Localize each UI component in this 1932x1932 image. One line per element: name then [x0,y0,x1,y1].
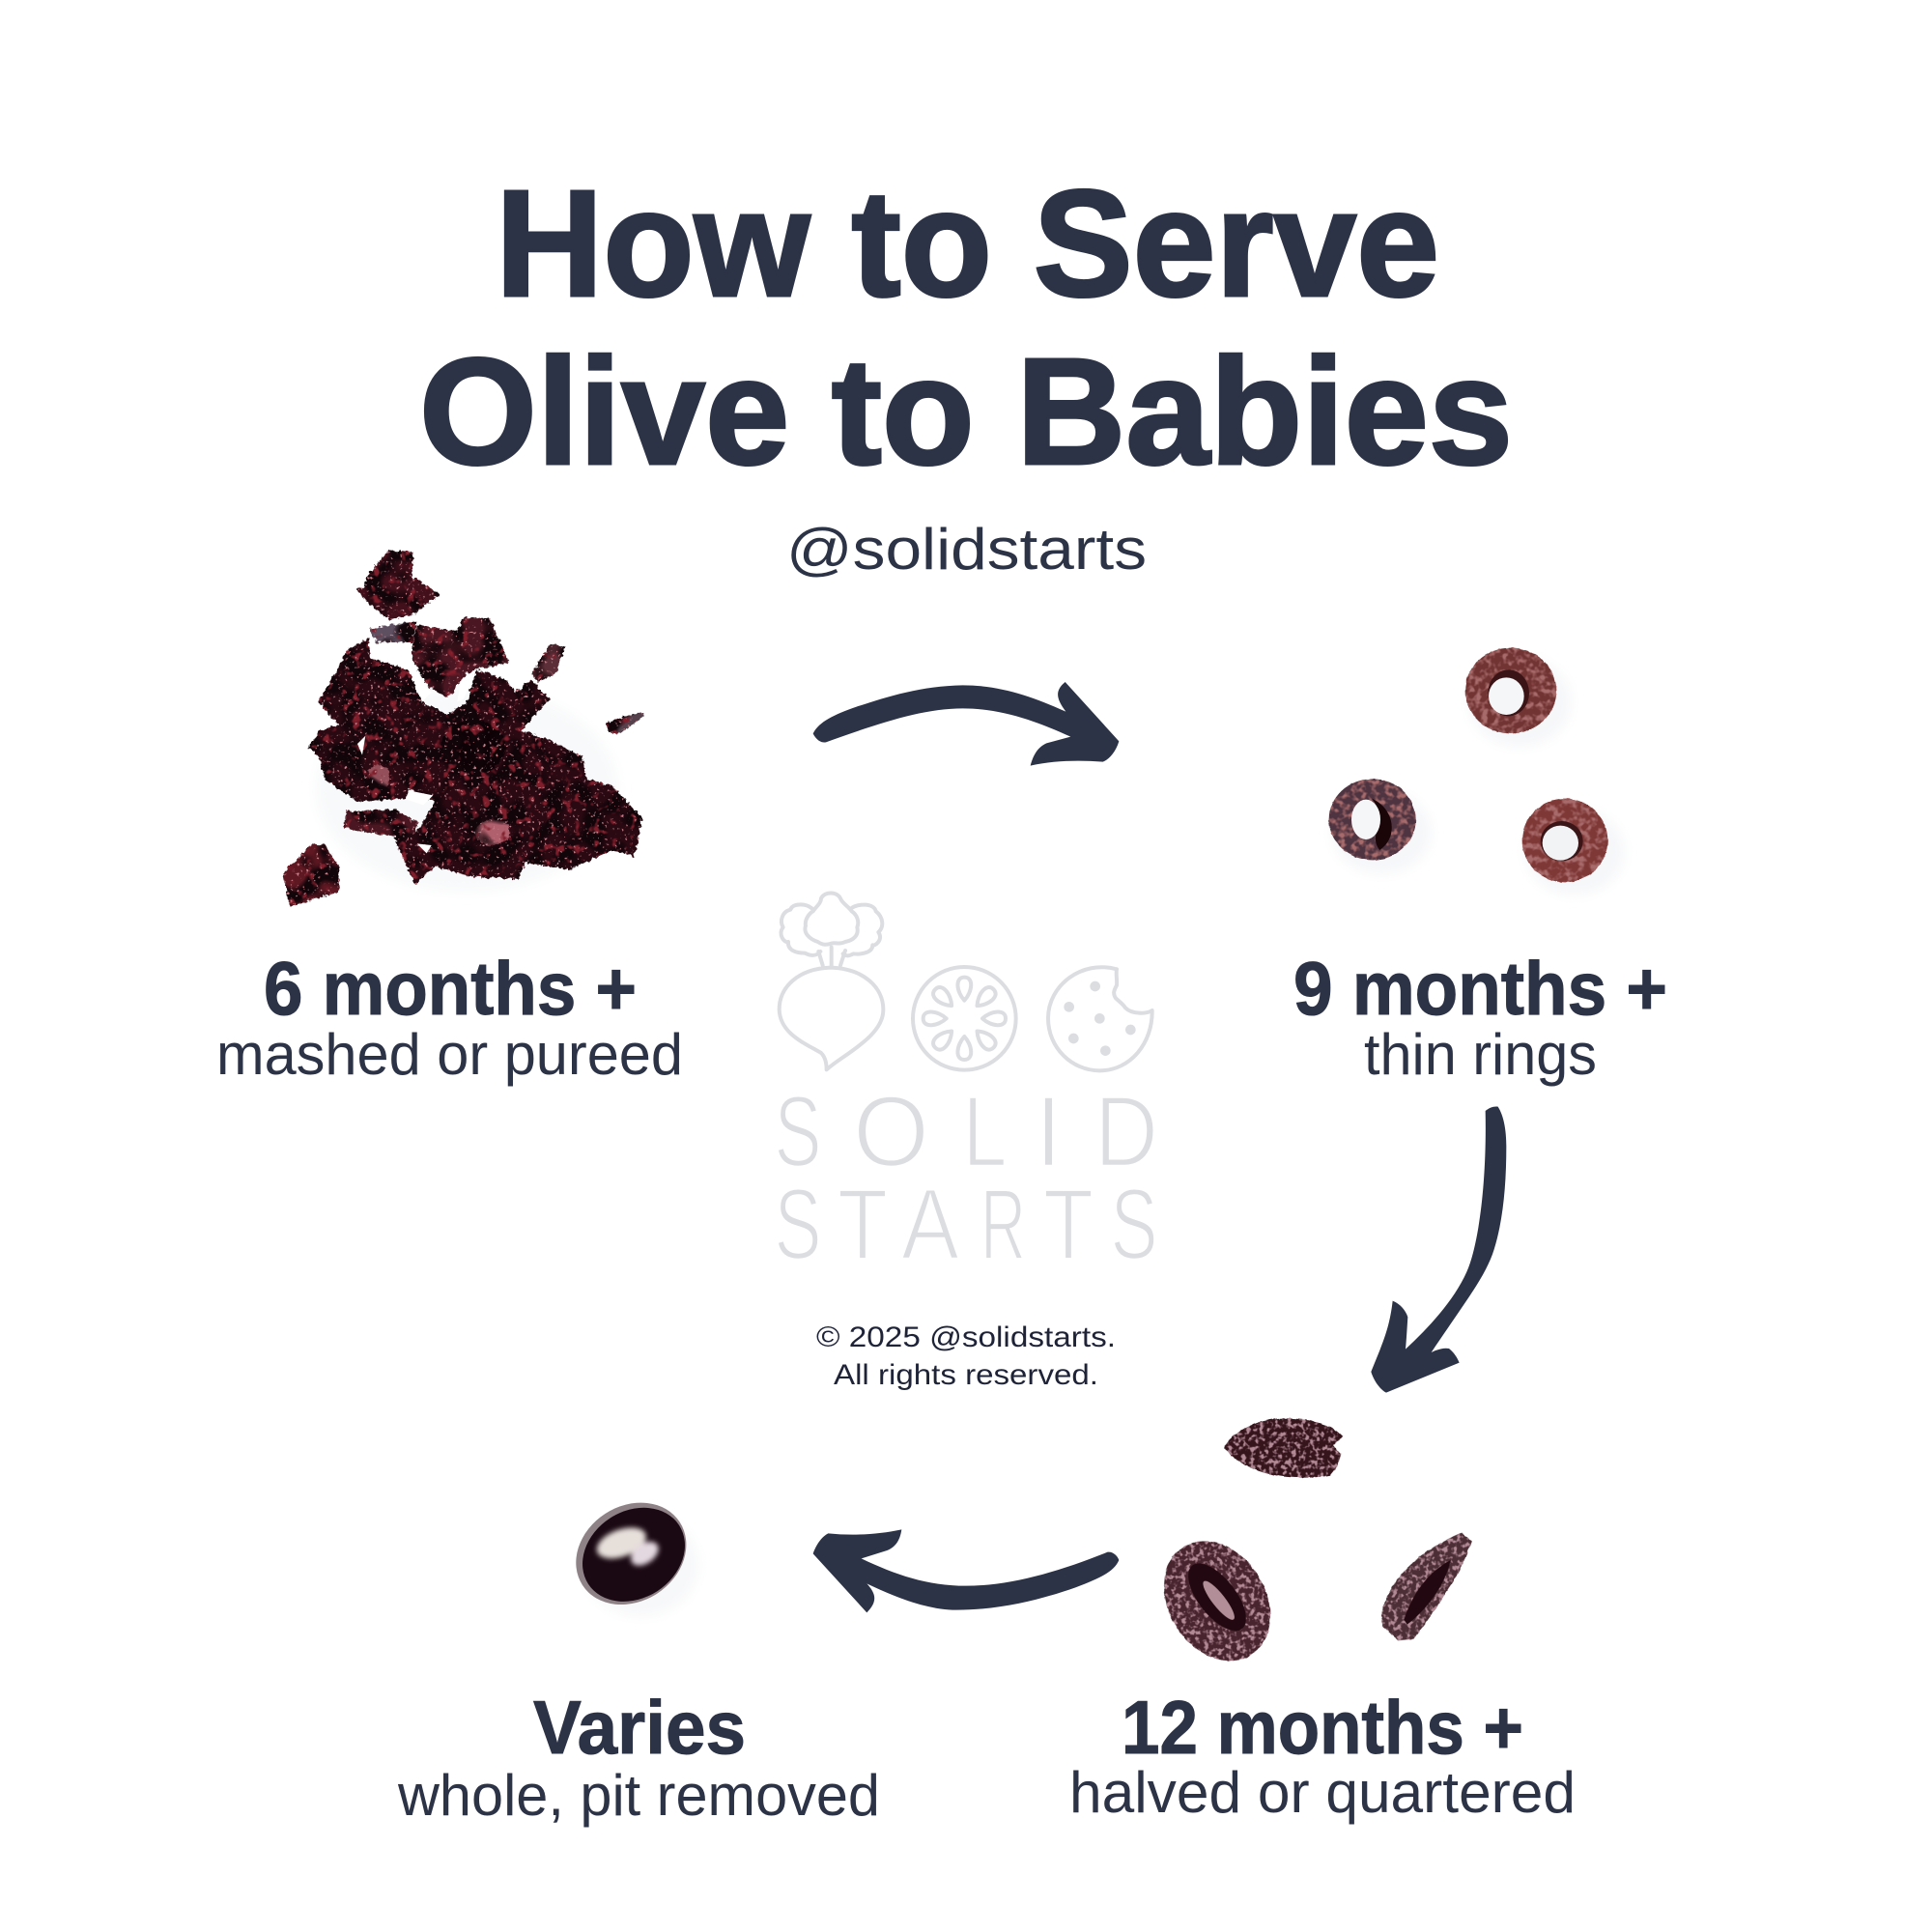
wordmark: A [901,1169,960,1281]
arrow: 9 months to 12 months [1371,1107,1506,1393]
wordmark: S [775,1076,821,1188]
label: 12 months: 12 months + [1122,1685,1523,1770]
arrow: 6 months to 9 months [813,682,1119,766]
label: 9 months: 9 months + [1293,946,1667,1031]
wordmark: T [838,1169,888,1281]
wordmark: S [775,1169,821,1281]
title: Olive to Babies [419,327,1513,497]
label: 9 months [1293,946,1667,1087]
image: whole olive [556,1482,706,1625]
image: halved and quartered olives [1143,1418,1471,1681]
image: olive thin rings [1329,648,1625,895]
icon: cucumber slice [913,967,1016,1070]
title: How to Serve [496,159,1439,328]
wordmark: S [1111,1169,1157,1281]
handle: @solidstarts [786,517,1147,582]
wordmark: L [962,1076,1007,1188]
label: 12 months: halved or quartered [1069,1760,1576,1825]
copyright: All rights reserved. [834,1359,1098,1391]
wordmark: D [1094,1076,1158,1188]
icon: cookie [1048,967,1152,1070]
arrow: 12 months to varies [813,1529,1119,1612]
wordmark: T [1043,1169,1094,1281]
wordmark [775,1076,1158,1281]
label: varies: Varies [533,1685,746,1770]
label: varies: whole, pit removed [397,1763,880,1828]
label: 9 months: thin rings [1364,1022,1597,1087]
label: 12 months [1069,1685,1576,1825]
label: 6 months [216,946,683,1087]
wordmark: I [1035,1076,1063,1188]
icon: beet [780,893,883,1069]
copyright [816,1321,1116,1391]
image: mashed olive [283,550,644,906]
wordmark: O [853,1076,929,1188]
copyright: © 2025 @solidstarts. [816,1321,1116,1353]
title [419,159,1513,497]
wordmark: R [980,1169,1026,1281]
label: 6 months: 6 months + [264,946,637,1031]
label: 6 months: mashed or pureed [216,1022,683,1087]
label: varies [397,1685,880,1828]
logo: solid starts watermark [775,893,1158,1281]
